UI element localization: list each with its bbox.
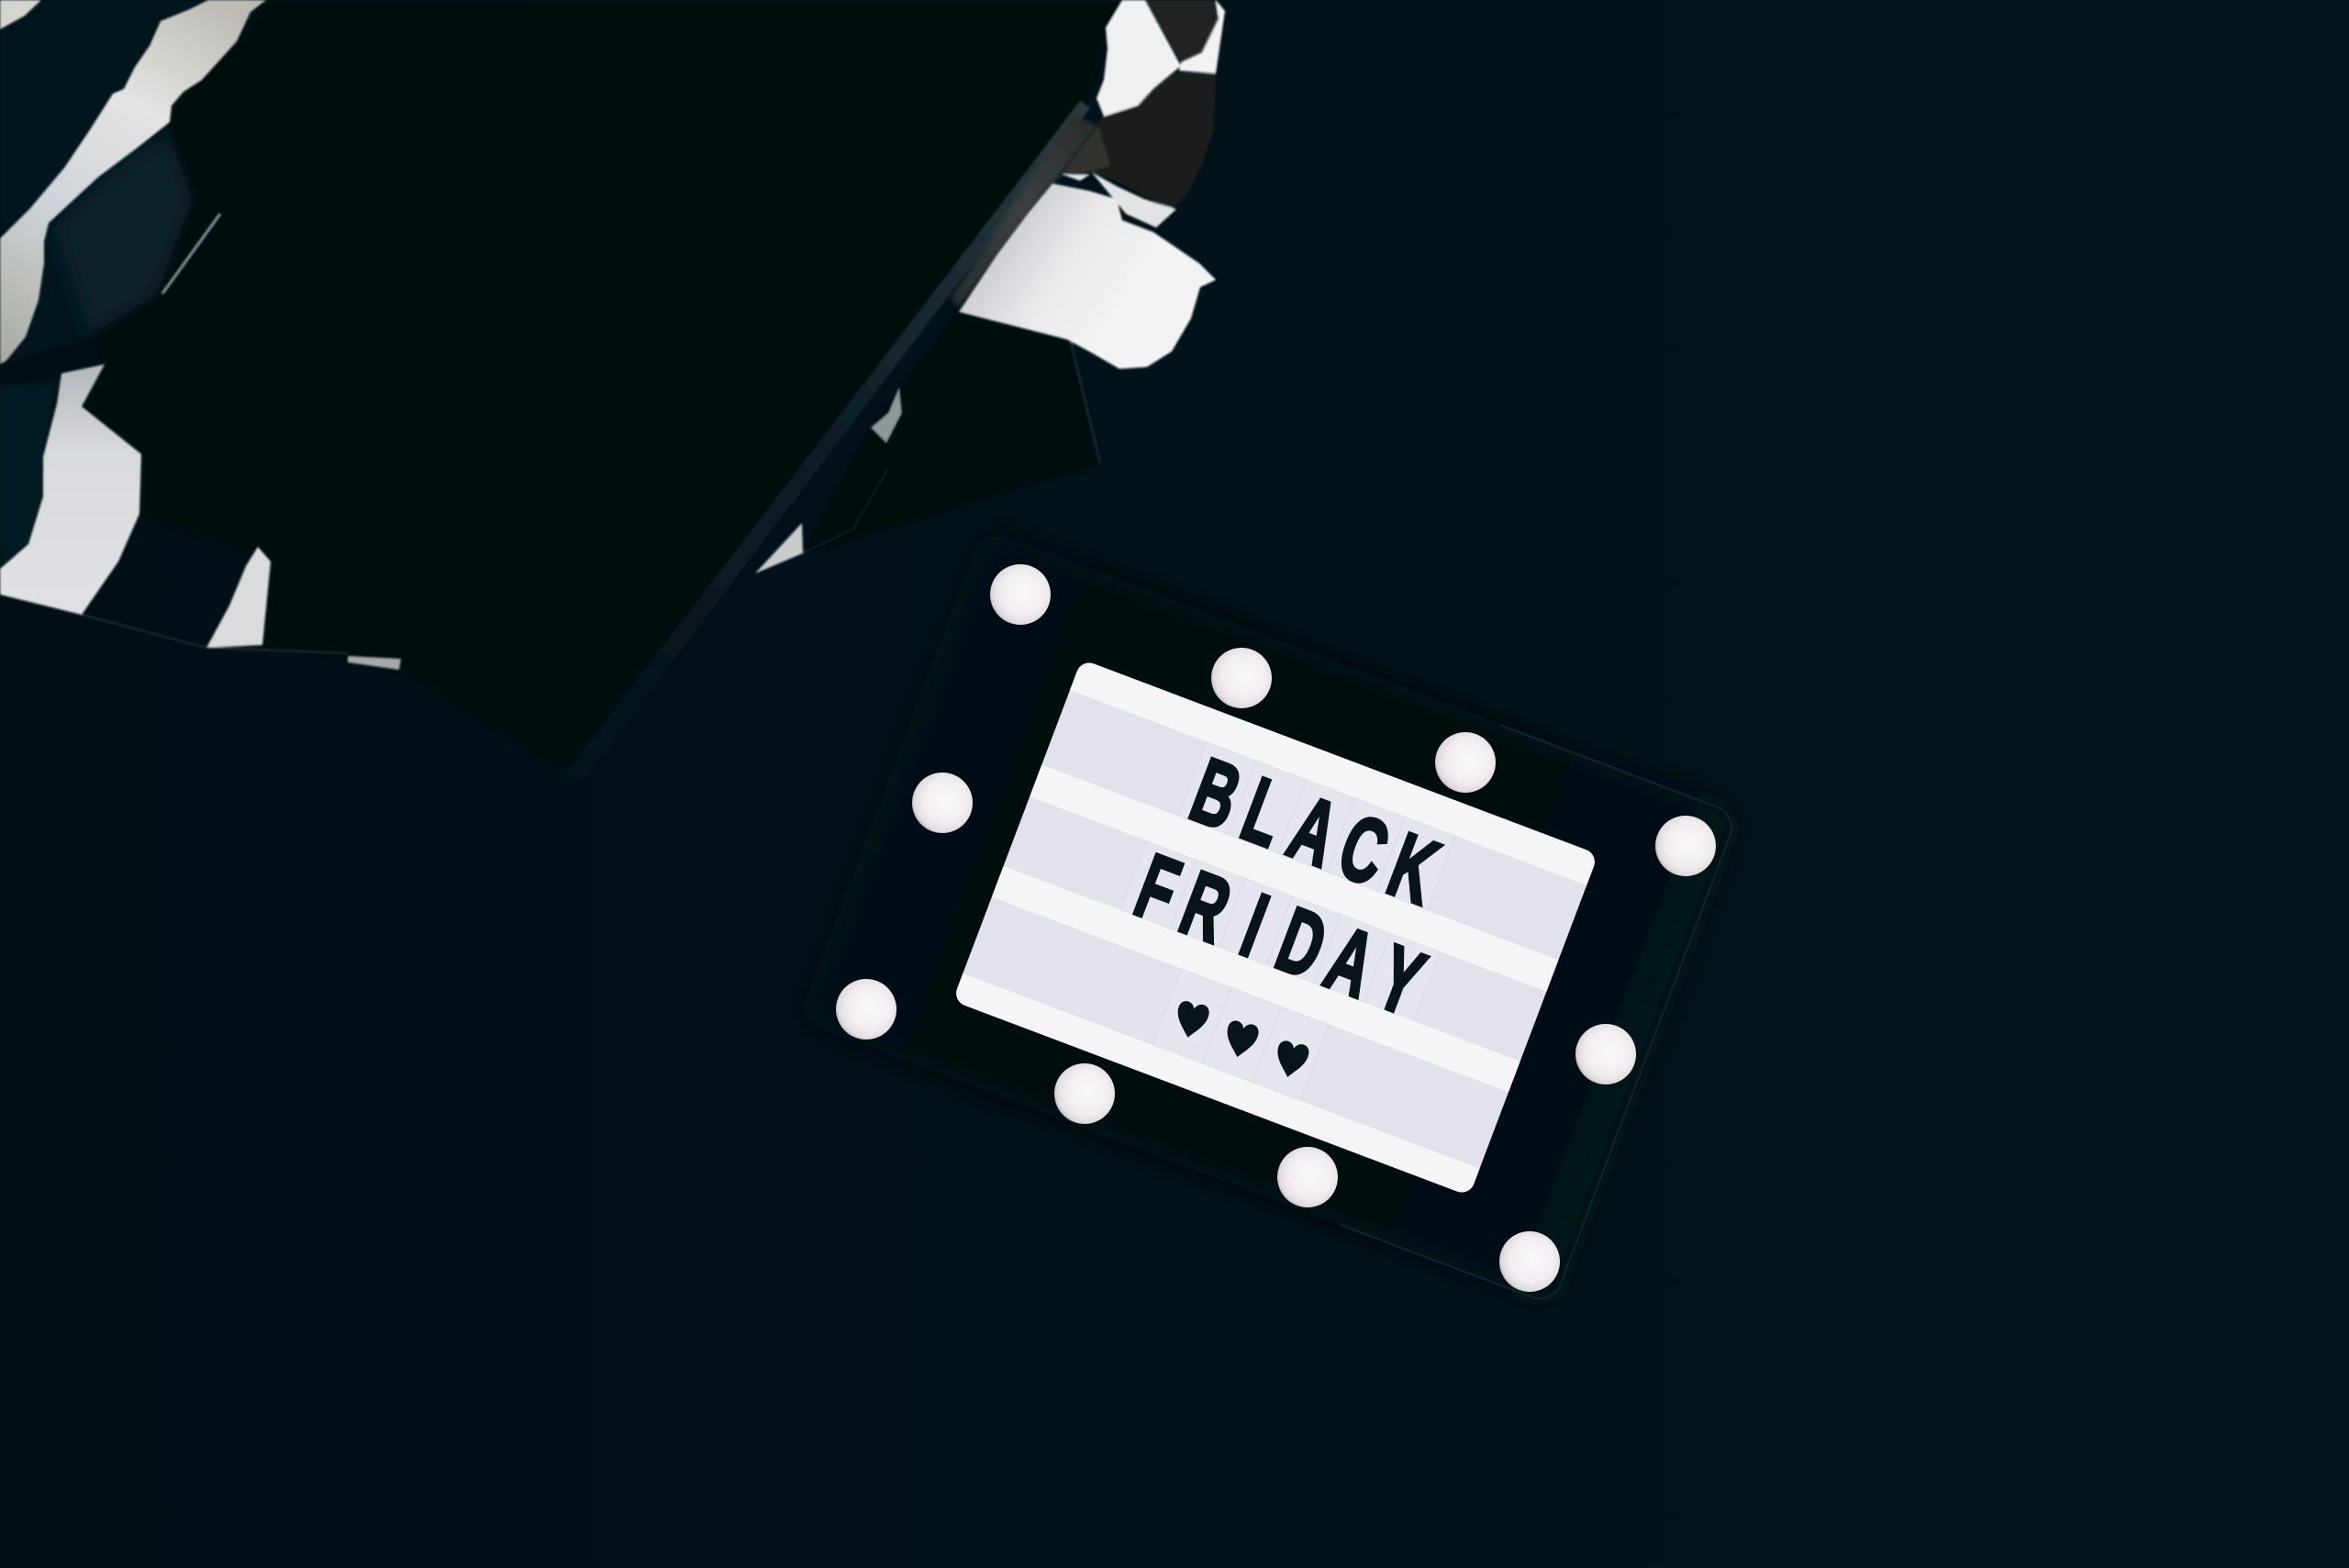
napkin edge line <box>82 615 348 653</box>
text: BLACK: B <box>1179 739 1253 850</box>
napkin dark base top left <box>0 0 266 364</box>
text: BLACK: A <box>1276 776 1352 886</box>
white pearls <box>836 564 1716 1292</box>
text: FRIDAY: F <box>1123 835 1192 943</box>
small triangle scrap <box>755 523 803 573</box>
text: BLACK <box>1179 739 1451 924</box>
napkin white lower stripe <box>0 364 141 615</box>
curved thin edge <box>803 468 888 553</box>
box corner line <box>1071 342 1100 463</box>
device edge highlight <box>564 101 1090 780</box>
text: BLACK: K <box>1376 814 1451 924</box>
napkin white curl small <box>1062 174 1090 181</box>
lightbox <box>952 659 1598 1196</box>
dark box top left <box>82 0 1122 775</box>
lightbox panel <box>952 659 1598 1196</box>
icon: three hearts <box>1167 995 1316 1084</box>
napkin dark middle <box>1062 73 1216 208</box>
napkin white scrap <box>348 656 401 670</box>
text: FRIDAY: A <box>1313 906 1388 1017</box>
napkin white sliver <box>162 214 220 294</box>
napkin dark top diamond <box>1147 0 1219 61</box>
black box lower <box>803 312 1100 553</box>
lightbox white rails <box>952 659 1598 1196</box>
striped napkin right <box>755 0 1225 573</box>
napkin white top <box>1097 0 1181 117</box>
napkin white curl <box>1092 172 1176 228</box>
grey band beside edge <box>951 115 1098 307</box>
napkin white top right <box>1179 0 1225 73</box>
napkin dark middle lighter fold <box>1062 126 1110 174</box>
napkin white corner <box>0 0 41 29</box>
tray edge line <box>1314 725 1738 1305</box>
letter cells <box>1080 734 1480 1129</box>
text: FRIDAY: I <box>1230 874 1280 976</box>
text: FRIDAY: R <box>1168 851 1243 962</box>
text: FRIDAY: Y <box>1364 926 1437 1035</box>
small scrap mid <box>871 387 902 443</box>
napkin dark stripe lower <box>0 382 57 569</box>
glass tray shadow <box>803 530 1739 1305</box>
napkin white big piece <box>959 183 1216 369</box>
napkin dark textured patch <box>52 135 195 337</box>
text: FRIDAY: D <box>1264 888 1340 998</box>
striped napkin left <box>0 0 401 670</box>
napkin white wedge <box>206 547 271 648</box>
text: BLACK: L <box>1230 758 1298 866</box>
text: BLACK: C <box>1326 795 1401 905</box>
napkin white long stripe <box>0 0 266 364</box>
text: FRIDAY <box>1123 835 1437 1035</box>
